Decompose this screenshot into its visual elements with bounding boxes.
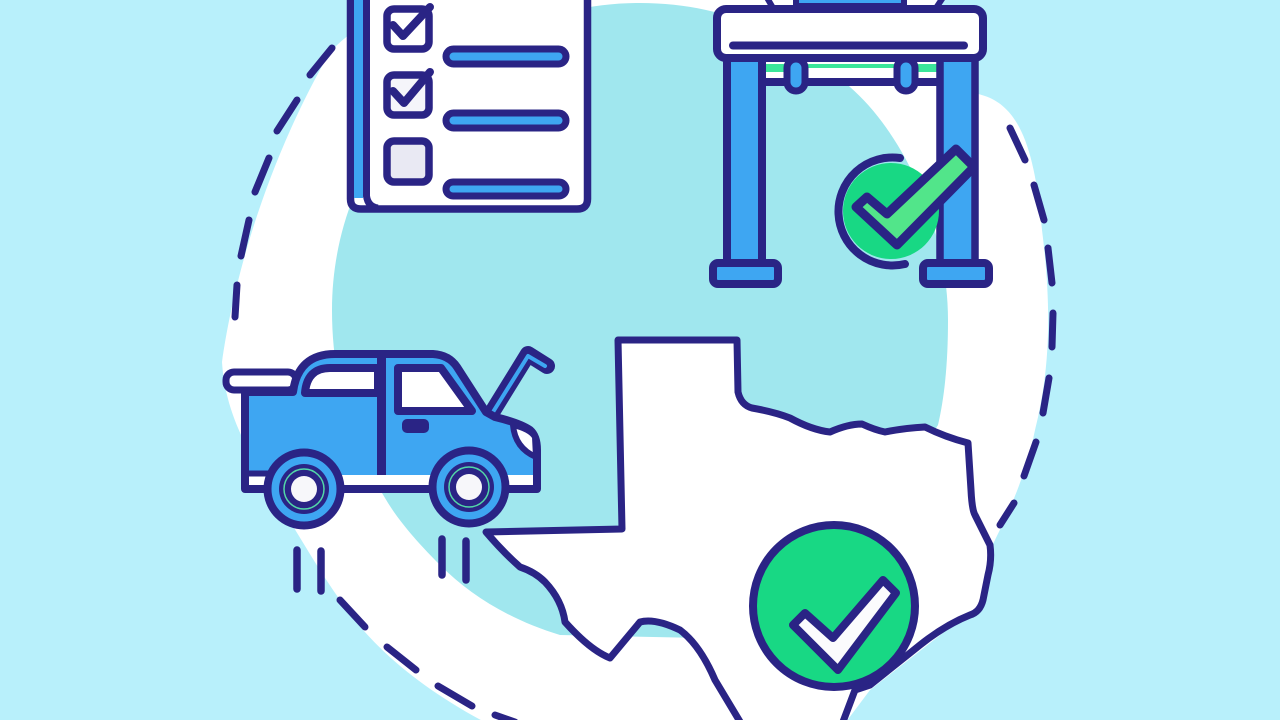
checked box 2 [387, 72, 430, 115]
feet [713, 263, 778, 284]
Texas map [486, 340, 991, 720]
front window [398, 368, 472, 411]
inspection gate [713, 0, 989, 284]
handle [402, 419, 429, 433]
large green check badge [753, 525, 915, 687]
left pillar [727, 58, 762, 264]
top unit [766, 0, 944, 8]
speed lines [297, 539, 466, 591]
body [245, 354, 537, 489]
clamps [787, 59, 805, 91]
pickup truck [226, 354, 547, 526]
spoiler [226, 372, 296, 390]
list bars [446, 49, 566, 196]
raised hood [491, 354, 547, 414]
gate check badge [838, 149, 974, 265]
rear wheel [268, 452, 340, 526]
white blob [222, 0, 1048, 720]
sill [249, 475, 533, 485]
rear window [305, 368, 378, 393]
door line [377, 354, 386, 475]
front wheel [432, 450, 506, 524]
right pillar [940, 58, 975, 264]
teal circle [332, 3, 948, 640]
clipboard checklist [350, 0, 588, 209]
inner rail [766, 62, 938, 80]
dashed circle [235, 48, 1053, 720]
empty box [387, 141, 429, 182]
beam [717, 9, 983, 58]
headlight [513, 425, 536, 457]
checked box 1 [387, 7, 430, 49]
